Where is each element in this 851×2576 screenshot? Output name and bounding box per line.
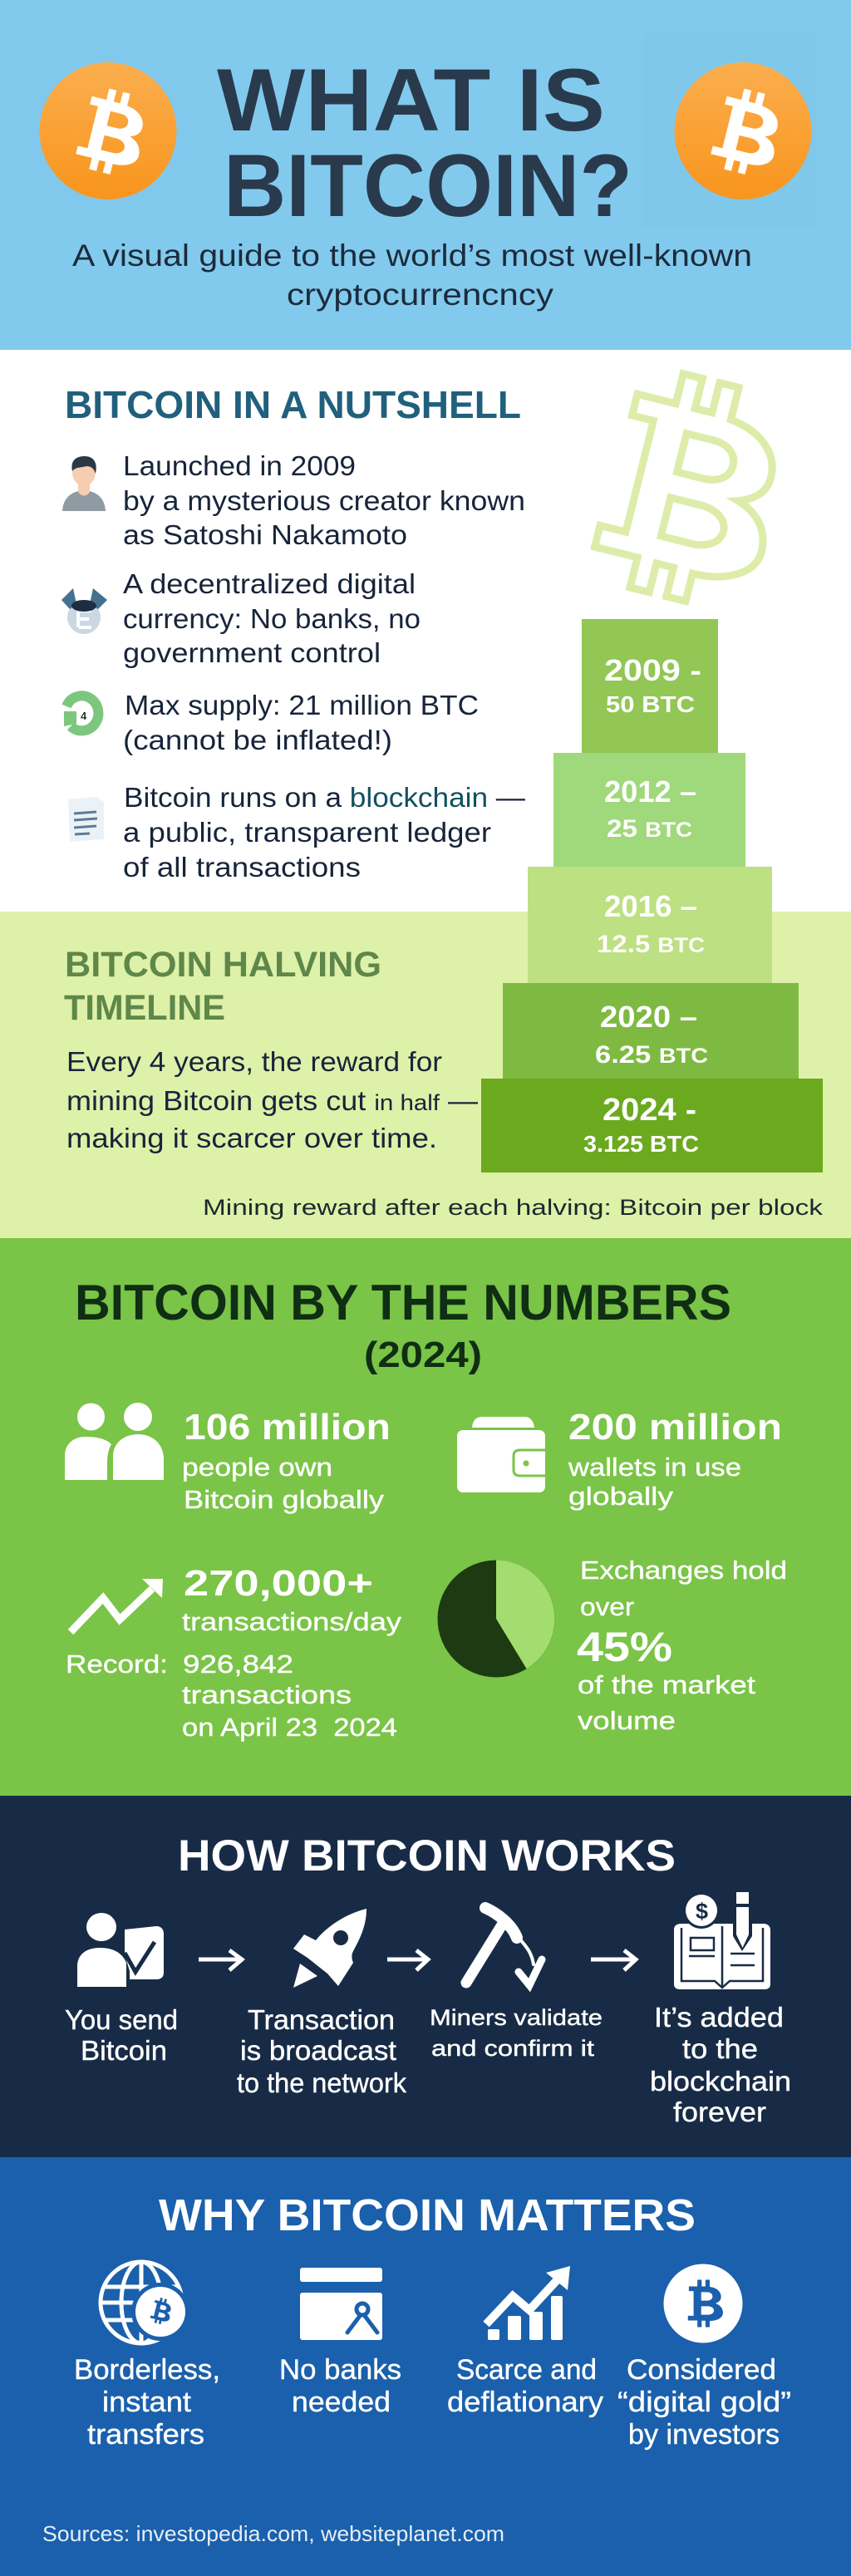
step: 2012 — [553, 753, 745, 868]
heading: why it matters: WHY BITCOIN MATTERS — [159, 2190, 696, 2240]
label: borderless: Borderless, — [74, 2354, 220, 2386]
text: launched: Launched in 2009 — [123, 450, 356, 481]
text: launched: as Satoshi Nakamoto — [123, 519, 407, 550]
icon: people — [65, 1403, 164, 1480]
label: borderless: transfers — [87, 2419, 204, 2451]
step: 2024: 2024 - — [603, 1093, 696, 1128]
text: blockchain: of all transactions — [123, 852, 361, 882]
step: 2009 — [582, 619, 718, 754]
icon: person sending — [77, 1913, 164, 1987]
arrow: step 1 — [199, 1950, 242, 1970]
heading: numbers: (2024) — [364, 1335, 482, 1375]
label: transaction broadcast: to the network — [237, 2067, 406, 2098]
icon: person — [62, 456, 106, 511]
step: 2024: 3.125 BTC — [583, 1131, 699, 1157]
panel: bitcoin by the numbers — [0, 1238, 851, 1796]
chart: exchange share pie — [437, 1561, 555, 1677]
heading: numbers — [75, 1275, 731, 1375]
text: launched — [123, 450, 525, 550]
text: max supply: (cannot be inflated!) — [123, 725, 392, 755]
text: blockchain: Bitcoin runs on a blockchain — — [124, 782, 525, 813]
stat: 270,000+: 926,842 — [183, 1649, 293, 1679]
step: 2009: 2009 - — [604, 653, 701, 687]
label: no banks: No banks — [279, 2354, 401, 2386]
label: added to blockchain — [650, 2002, 791, 2127]
label: borderless: instant — [102, 2387, 192, 2418]
label: borderless — [74, 2354, 220, 2451]
panel: bitcoin in a nutshell — [0, 350, 851, 912]
label: you send bitcoin: Bitcoin — [81, 2035, 167, 2066]
label: transaction broadcast: Transaction — [248, 2004, 395, 2035]
subtitle: cryptocurrencncy — [287, 278, 554, 312]
stat: exchanges 45%: of the market — [578, 1670, 755, 1699]
stat: exchanges 45%: 45% — [577, 1624, 672, 1670]
stat: exchanges 45% — [577, 1556, 787, 1735]
stat: 106 million: 106 million — [184, 1407, 391, 1448]
step: 2016 — [528, 867, 772, 983]
stat: 270,000+ — [66, 1563, 402, 1742]
icon: wallet — [457, 1417, 545, 1492]
label: transaction broadcast: is broadcast — [240, 2035, 396, 2066]
heading: how it works: HOW BITCOIN WORKS — [178, 1831, 676, 1880]
step: 2024 — [481, 1079, 823, 1172]
subtitle: A visual guide to the world’s most well-known — [72, 238, 752, 273]
label: you send bitcoin: You send — [65, 2004, 178, 2035]
panel: why bitcoin matters — [0, 2157, 851, 2576]
step: 2009: 50 BTC — [606, 691, 695, 717]
stat: 200 million: wallets in use — [568, 1453, 741, 1482]
text: max supply — [123, 690, 479, 755]
text: halving description: mining Bitcoin gets cut in half — — [66, 1085, 478, 1116]
stat: exchanges 45%: volume — [578, 1706, 676, 1735]
stat: 200 million: 200 million — [568, 1407, 782, 1448]
label: digital gold — [617, 2354, 791, 2451]
label: you send bitcoin — [65, 2004, 178, 2066]
label: added to blockchain: to the — [682, 2033, 758, 2064]
icon: rising chart — [486, 2266, 570, 2340]
icon: decentralized shield — [61, 588, 107, 634]
stat: 200 million — [568, 1407, 782, 1511]
stat: 270,000+: 270,000+ — [184, 1563, 373, 1604]
icon: pickaxe and check — [466, 1908, 542, 1985]
label: scarce: Scarce and — [456, 2354, 597, 2386]
heading: halving: TIMELINE — [64, 988, 225, 1028]
title: BITCOIN? — [224, 135, 632, 235]
icon: document — [68, 797, 104, 842]
text: blockchain: a public, transparent ledger — [123, 817, 491, 848]
step: 2020: 6.25 BTC — [595, 1041, 708, 1069]
label: digital gold: Considered — [627, 2354, 776, 2386]
heading: halving: BITCOIN HALVING — [65, 945, 381, 985]
text: halving description: Every 4 years, the reward for — [66, 1046, 442, 1077]
icon: supply ring: 4 — [81, 710, 87, 722]
step: 2020 — [503, 983, 799, 1079]
stat: 270,000+: on April 23 2024 — [182, 1713, 397, 1742]
stat: 106 million: Bitcoin globally — [184, 1485, 385, 1514]
title — [217, 50, 632, 235]
heading: halving — [64, 945, 381, 1028]
icon: no bank card — [300, 2268, 382, 2340]
label: digital gold: “digital gold” — [617, 2387, 791, 2418]
text: blockchain — [123, 782, 525, 882]
text: launched: by a mysterious creator known — [123, 485, 525, 516]
label: transaction broadcast — [237, 2004, 406, 2098]
step: 2012: 25 BTC — [607, 815, 692, 843]
panel: header — [0, 0, 851, 350]
caption: mining reward: Mining reward after each halving: Bitcoin per block — [203, 1195, 824, 1220]
icon: ledger book: $ — [696, 1899, 708, 1924]
text: decentralized: government control — [123, 637, 381, 668]
stat: 270,000+: transactions — [182, 1680, 352, 1709]
icon: bitcoin coin right — [675, 62, 811, 199]
icon: large bitcoin outline — [588, 363, 799, 616]
label: scarce — [447, 2354, 603, 2418]
step: 2016: 2016 – — [604, 889, 697, 923]
arrow: step 2 — [387, 1950, 428, 1970]
text: decentralized — [123, 568, 421, 668]
stat: 106 million — [182, 1407, 391, 1514]
icon: ledger book — [674, 1892, 770, 1989]
panel: bitcoin halving timeline — [0, 912, 851, 1238]
stat: 270,000+: transactions/day — [182, 1607, 402, 1636]
icon: bitcoin coin white — [663, 2264, 743, 2343]
label: miners validate — [430, 2005, 603, 2061]
label: digital gold: by investors — [628, 2419, 780, 2451]
step: 2020: 2020 – — [600, 1000, 697, 1034]
step: 2016: 12.5 BTC — [597, 931, 705, 958]
icon: bitcoin coin left — [40, 62, 176, 199]
text: decentralized: A decentralized digital — [123, 568, 416, 599]
text: max supply: Max supply: 21 million BTC — [125, 690, 479, 720]
stat: exchanges 45%: Exchanges hold — [580, 1556, 787, 1585]
text: decentralized: currency: No banks, no — [123, 603, 421, 634]
chart: halving pyramid — [481, 619, 823, 1172]
heading: nutshell: BITCOIN IN A NUTSHELL — [65, 383, 521, 426]
icon: trend arrow — [71, 1579, 163, 1632]
icon: supply ring — [64, 696, 98, 730]
sources: Sources: investopedia.com, websiteplanet.com — [42, 2521, 504, 2546]
label: no banks — [279, 2354, 401, 2418]
step: 2012: 2012 – — [604, 774, 696, 809]
label: miners validate: Miners validate — [430, 2005, 603, 2030]
arrow: step 3 — [591, 1950, 636, 1970]
text: halving description: making it scarcer over time. — [66, 1123, 437, 1153]
label: scarce: deflationary — [447, 2387, 603, 2418]
label: no banks: needed — [292, 2387, 391, 2418]
text: halving description — [66, 1046, 478, 1153]
stat: 270,000+: Record: — [66, 1649, 168, 1679]
panel: how bitcoin works — [0, 1796, 851, 2157]
stat: 200 million: globally — [568, 1482, 674, 1511]
subtitle — [72, 238, 752, 312]
label: added to blockchain: forever — [673, 2097, 766, 2127]
icon: globe with coin — [101, 2262, 189, 2343]
stat: exchanges 45%: over — [580, 1592, 634, 1621]
label: added to blockchain: blockchain — [650, 2066, 791, 2097]
stat: 106 million: people own — [182, 1453, 332, 1482]
heading: numbers: BITCOIN BY THE NUMBERS — [75, 1275, 731, 1330]
icon: rocket — [293, 1909, 366, 1988]
title: WHAT IS — [217, 50, 605, 150]
label: miners validate: and confirm it — [431, 2036, 595, 2061]
label: added to blockchain: It’s added — [654, 2002, 784, 2033]
